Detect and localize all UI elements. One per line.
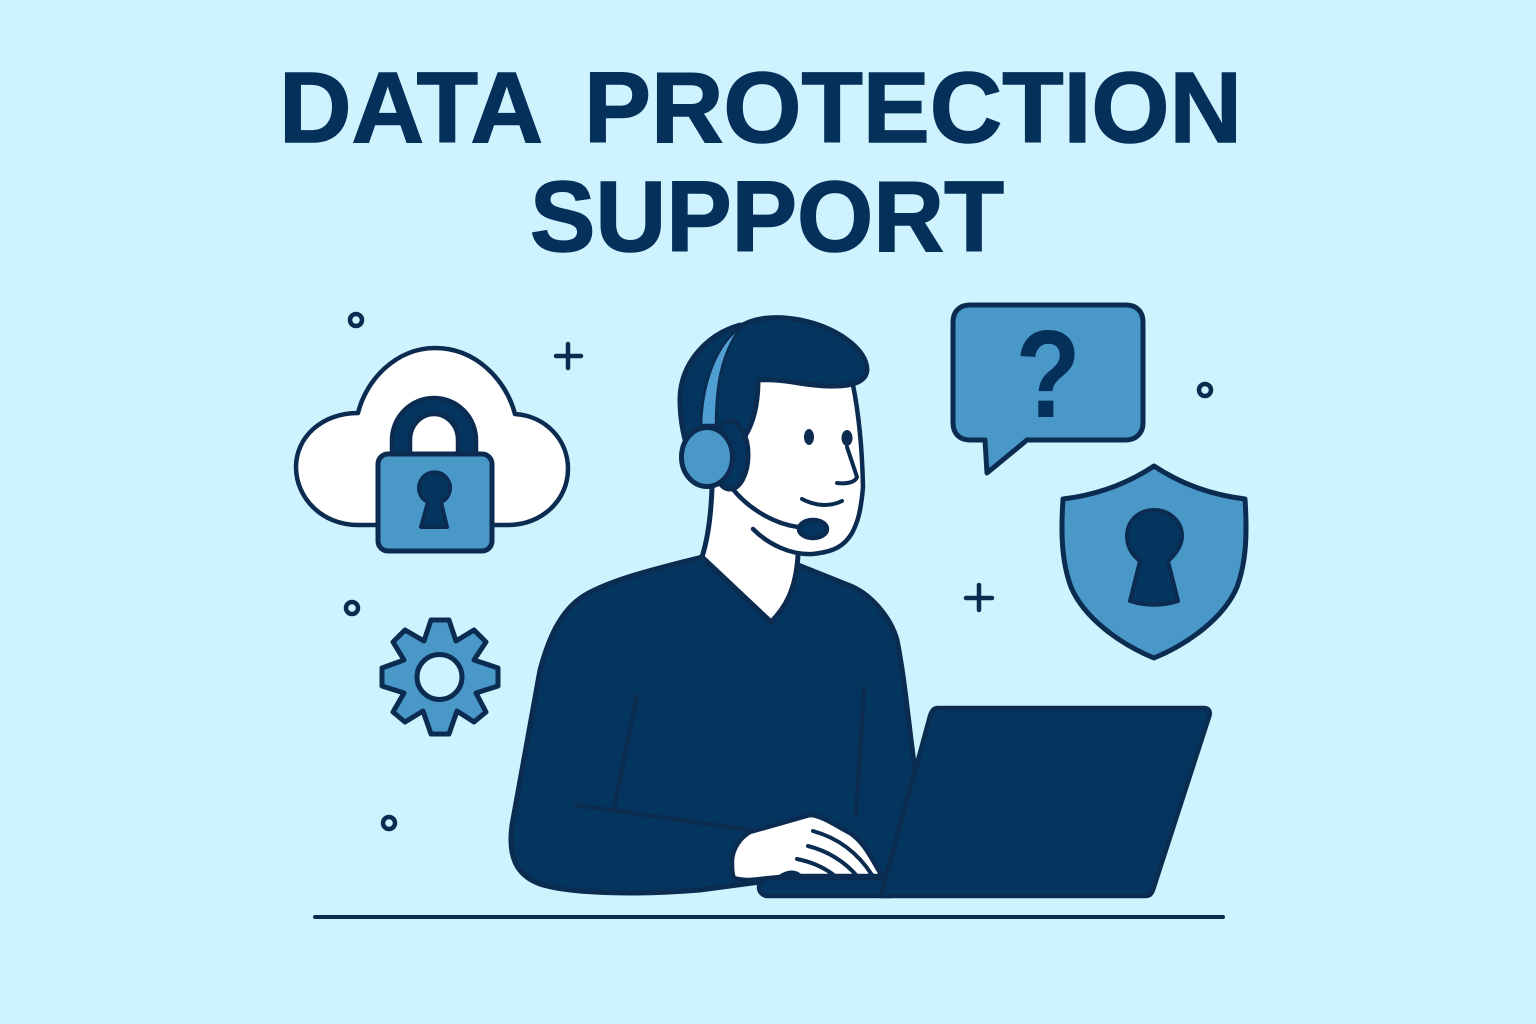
decorative dots and plus marks [346,314,1211,829]
icon: gear [382,620,498,734]
fingers [797,831,872,876]
headband [701,327,741,425]
headset ear cup [712,421,748,489]
icon: cloud with padlock [296,348,568,551]
icon: speech bubble with question mark [953,304,1143,473]
jaw outline [753,385,863,554]
laptop base [759,878,890,896]
smile [802,499,842,505]
head and neck skin [702,380,863,622]
microphone [799,520,827,538]
nose [837,447,857,483]
title: DATA [279,52,543,164]
laptop screen [881,708,1210,896]
hair back [680,325,745,455]
eyes [804,429,814,445]
microphone boom [732,488,798,527]
question mark: ? [1015,304,1081,444]
hand [732,815,882,880]
laptop [759,708,1210,896]
shield keyhole [1127,510,1182,605]
person [511,318,915,893]
desk line [315,915,1223,919]
neck and collar outline [702,488,798,622]
icon: shield with keyhole [1062,466,1246,658]
keyhole [419,472,450,527]
title: SUPPORT [530,161,1004,273]
cloud [296,348,568,525]
sleeve lines [576,688,864,830]
padlock body [378,454,492,551]
padlock shackle [392,398,476,455]
torso [511,557,915,893]
title [279,52,1242,273]
hair [714,318,867,436]
title: PROTECTION [584,52,1242,164]
